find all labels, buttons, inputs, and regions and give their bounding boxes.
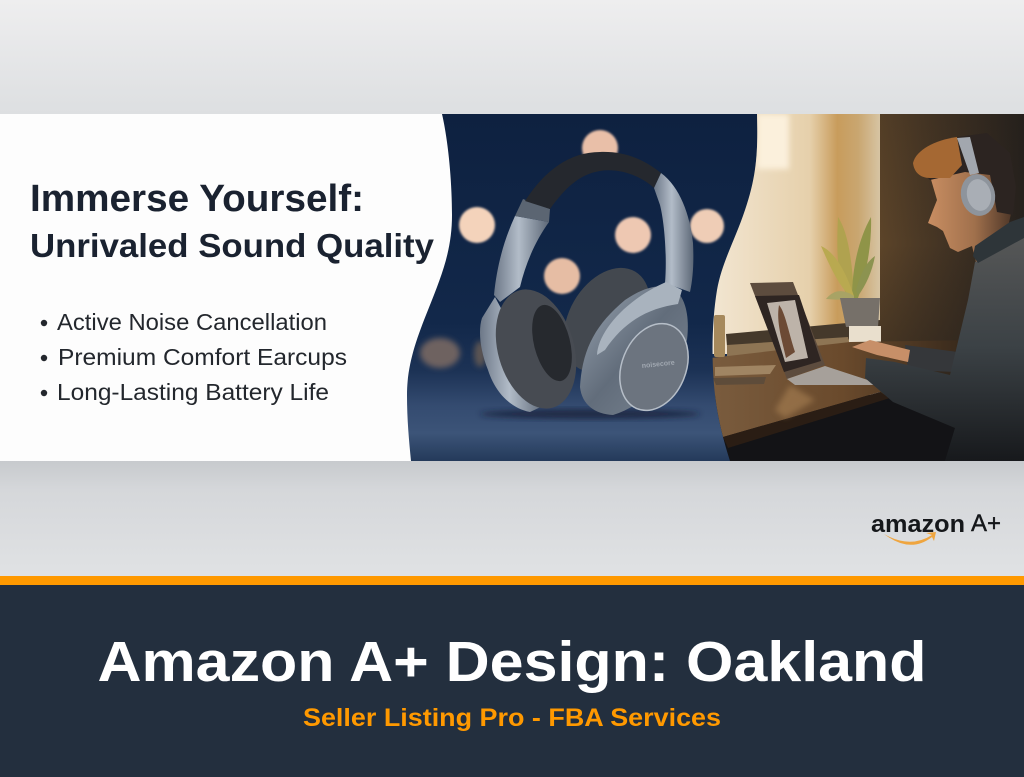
plant pot	[840, 298, 880, 327]
dark wall	[880, 114, 1024, 404]
coffee mug	[849, 326, 881, 342]
yoke	[597, 282, 682, 355]
right earcup housing	[580, 286, 688, 415]
floor shadow	[480, 409, 700, 419]
headset	[957, 137, 996, 216]
rear hand	[852, 340, 910, 362]
right arm	[654, 173, 693, 292]
collar	[973, 217, 1024, 263]
panel heading: Unrivaled Sound Quality	[30, 227, 435, 264]
icon: headphones	[480, 152, 701, 421]
logo smile	[884, 532, 936, 545]
banner panel	[0, 114, 1024, 461]
panel heading: Immerse Yourself:	[30, 178, 364, 220]
panel: lifestyle photo	[710, 114, 1024, 461]
panel heading	[30, 178, 435, 264]
right earcup plate	[607, 313, 701, 421]
sweater	[865, 236, 1024, 461]
feature bullet list: Active Noise Cancellation	[57, 309, 327, 335]
footer title: Amazon A+ Design: Oakland	[98, 630, 927, 694]
laptop	[750, 282, 878, 385]
panel: white text area	[0, 114, 452, 461]
page background	[0, 0, 1024, 576]
feature bullet list	[41, 309, 347, 405]
feature bullet list: Long-Lasting Battery Life	[57, 379, 329, 405]
plant	[821, 217, 875, 300]
window sill	[726, 320, 880, 358]
window and curtain	[710, 114, 882, 354]
left earcup opening	[525, 301, 579, 385]
bokeh lights	[420, 130, 724, 368]
amazon A+ logo: amazon	[871, 511, 965, 538]
person	[852, 133, 1024, 461]
panel: navy product background	[400, 114, 770, 461]
right earcup plate: noisecore	[641, 360, 675, 370]
left earcup cushion	[483, 280, 589, 418]
headband pad	[525, 152, 661, 209]
hair	[913, 133, 1016, 215]
footer subtitle: Seller Listing Pro - FBA Services	[303, 704, 721, 732]
left arm hinge	[515, 199, 550, 222]
desk	[712, 340, 956, 461]
rear arm	[905, 345, 958, 372]
right earcup cushion	[546, 253, 668, 387]
neck and face	[928, 172, 1011, 262]
amazon A+ logo	[871, 510, 1001, 545]
left arm	[494, 216, 549, 302]
feature bullet list: Premium Comfort Earcups	[58, 344, 347, 370]
left earcup shell	[480, 297, 545, 412]
desk items	[713, 315, 776, 385]
footer band	[0, 576, 1024, 777]
amazon A+ logo: A+	[971, 510, 1001, 537]
